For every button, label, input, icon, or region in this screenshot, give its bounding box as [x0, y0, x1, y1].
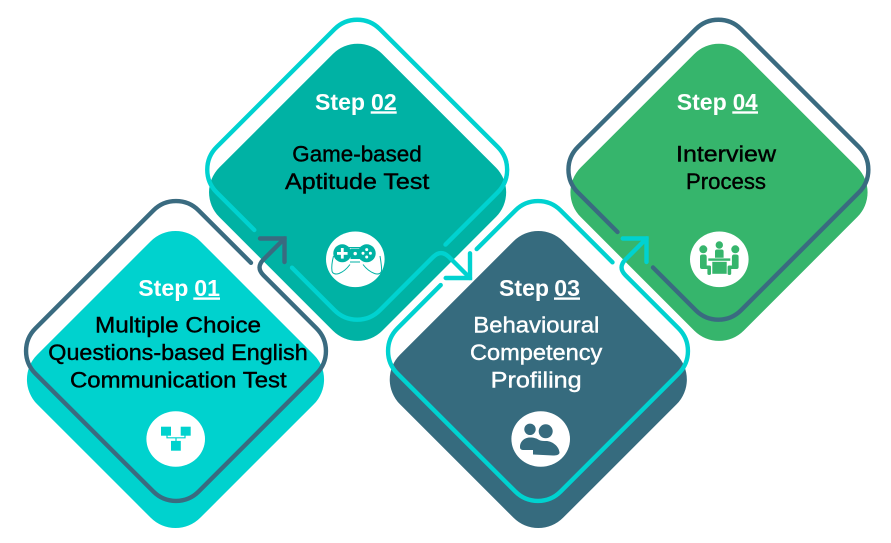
- step label: step 03: [499, 275, 580, 301]
- step label: step 03: 03: [554, 275, 580, 301]
- diamond outline: step 04: [568, 20, 868, 320]
- text: multiple choice questions-based english communication test: [48, 313, 308, 392]
- text: multiple choice questions-based english communication test: Multiple Choice: [95, 313, 261, 338]
- step label: step 01: [138, 275, 220, 301]
- step label: step 01: Step: [138, 275, 188, 301]
- step label: step 04: 04: [733, 89, 758, 115]
- diamond fill: step 03: [375, 216, 701, 543]
- step label: step 04: [677, 89, 758, 115]
- text: behavioural competency profiling: Competency: [470, 340, 603, 365]
- step label: step 03: Step: [499, 275, 549, 301]
- text: interview process: [676, 142, 777, 194]
- diamond fill: step 01: [12, 216, 339, 543]
- text: behavioural competency profiling: [470, 313, 603, 392]
- diamond fill: step 02: [195, 29, 521, 355]
- step label: step 01: 01: [194, 275, 220, 301]
- text: behavioural competency profiling: Profiling: [491, 367, 582, 392]
- text: interview process: Process: [686, 169, 766, 194]
- step label: step 02: Step: [315, 89, 365, 115]
- step label: step 02: [315, 89, 397, 115]
- panel: step 01 multiple choice english test: [12, 201, 339, 543]
- panel: step 04 interview process: [556, 20, 882, 355]
- arrow: step 03 to step 04: [623, 238, 646, 262]
- text: multiple choice questions-based english communication test: Communication Test: [70, 367, 287, 392]
- icon: meeting table: [690, 231, 749, 287]
- arrow: step 01 to step 02: [260, 238, 284, 262]
- diamond fill: step 04: [556, 29, 882, 355]
- text: behavioural competency profiling: Behavioural: [473, 313, 599, 338]
- diamond outline: step 02: [207, 20, 507, 320]
- icon: hierarchy blocks: [146, 411, 205, 467]
- icon: people: [511, 411, 570, 467]
- text: game-based aptitude test: [285, 142, 430, 194]
- step label: step 02: 02: [371, 89, 397, 115]
- panel: step 02 game-based aptitude test: [195, 20, 521, 355]
- text: game-based aptitude test: Aptitude Test: [285, 169, 430, 194]
- text: multiple choice questions-based english communication test: Questions-based English: [48, 340, 308, 365]
- text: game-based aptitude test: Game-based: [292, 142, 422, 167]
- step label: step 04: Step: [677, 89, 727, 115]
- diamond outline: step 03: [388, 201, 688, 501]
- text: interview process: Interview: [676, 142, 777, 167]
- panel: step 03 behavioural competency profiling: [375, 201, 701, 543]
- arrow: step 02 to step 03: [446, 253, 470, 278]
- diamond outline: step 01: [26, 201, 326, 501]
- icon: game controller: [326, 231, 385, 287]
